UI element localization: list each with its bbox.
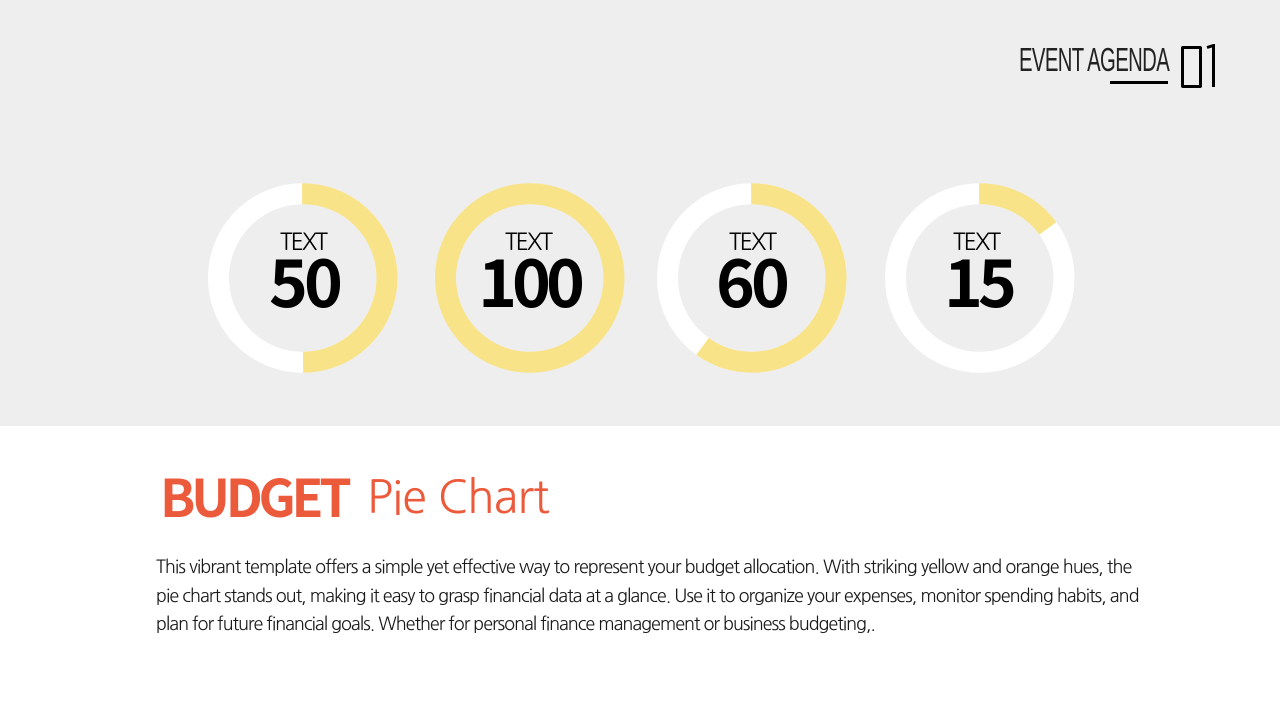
label: TEXT	[280, 231, 326, 254]
body text	[156, 558, 1139, 633]
header title text: EVENT AGENDA	[1019, 41, 1169, 78]
donut: 50	[208, 183, 398, 373]
body line 1: This vibrant template offers a simple yet effective way to represent your budget allocation. With striking yellow and orange hues, the	[156, 558, 1131, 576]
value: 60	[716, 231, 786, 327]
value: 100	[478, 231, 580, 327]
donut chart 100 percent	[435, 183, 624, 373]
label: TEXT	[505, 231, 551, 254]
body line 3: plan for future financial goals. Whether for personal finance management or business budgeting,.	[156, 615, 875, 633]
page number one	[1206, 44, 1215, 87]
donut chart 50 percent	[208, 183, 398, 373]
heading light words: Pie Chart	[367, 475, 548, 520]
donut: 100	[435, 183, 624, 373]
heading bold word: BUDGET	[160, 457, 347, 532]
header underline	[1110, 81, 1168, 84]
donut chart 60 percent	[657, 183, 846, 373]
label: TEXT	[953, 231, 999, 254]
value: 50	[269, 231, 339, 327]
value: 15	[944, 231, 1012, 327]
page number zero box	[1181, 46, 1202, 88]
donut: 15	[885, 183, 1074, 372]
label: TEXT	[729, 231, 775, 254]
donut: 60	[657, 183, 846, 373]
panel: grey top band	[0, 0, 1280, 426]
donut chart 15 percent	[885, 183, 1074, 372]
header: event agenda	[1019, 41, 1215, 88]
heading: budget pie chart	[160, 457, 550, 532]
body line 2: pie chart stands out, making it easy to grasp financial data at a glance. Use it to organize your expenses, monitor spending habits, and	[156, 587, 1139, 605]
